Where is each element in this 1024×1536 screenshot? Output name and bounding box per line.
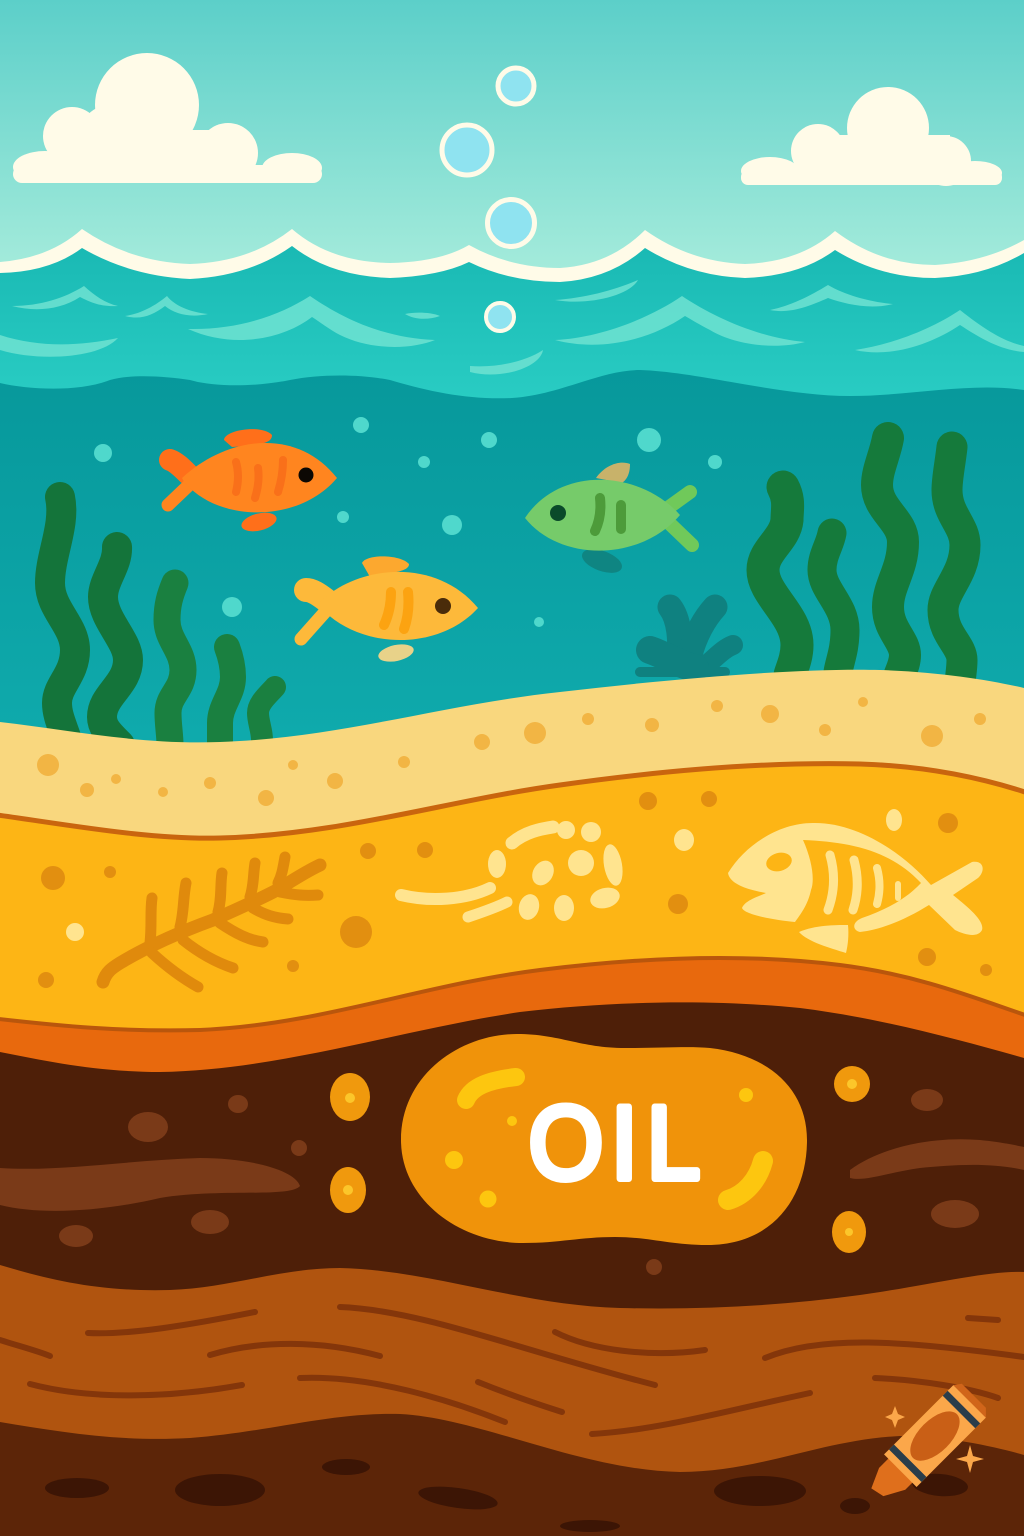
dark soil layer <box>0 1002 1024 1320</box>
strata lines <box>0 1307 1024 1434</box>
bedrock pebbles <box>45 1459 969 1532</box>
orange layer <box>0 958 1024 1100</box>
oil pool <box>401 1034 807 1245</box>
bottom bedrock layer <box>0 1414 1024 1536</box>
wave crest line <box>0 229 1024 282</box>
oil droplets <box>330 1066 870 1253</box>
bubbles <box>442 68 534 331</box>
amber fossil layer <box>0 764 1024 1090</box>
sand layer <box>0 670 1024 900</box>
oil dots <box>445 1088 753 1208</box>
fossil: shell <box>401 821 626 922</box>
oil label: OIL <box>529 1086 700 1201</box>
green fish <box>525 463 692 578</box>
coral <box>640 607 733 672</box>
deep water <box>0 370 1024 780</box>
amber layer specks <box>38 791 992 988</box>
oil highlights <box>466 1077 763 1200</box>
pale specks <box>66 809 902 941</box>
seaweed left <box>50 497 275 745</box>
cloud left <box>13 53 322 183</box>
rust strata layer <box>0 1265 1024 1480</box>
small water dots <box>94 417 722 627</box>
dark soil streaks <box>0 1089 1024 1275</box>
orange fish <box>168 429 337 535</box>
ripples <box>0 280 1024 375</box>
sky <box>0 0 1024 300</box>
sand grains <box>37 697 986 806</box>
icon: sparkles <box>885 1406 984 1473</box>
cloud right <box>741 87 1002 186</box>
yellow fish <box>301 556 478 665</box>
seaweed right <box>763 438 965 685</box>
shallow water <box>0 238 1024 430</box>
icon: crayon <box>861 1380 991 1510</box>
fossil: fish skeleton <box>728 823 983 953</box>
fossil: fern <box>103 857 320 987</box>
